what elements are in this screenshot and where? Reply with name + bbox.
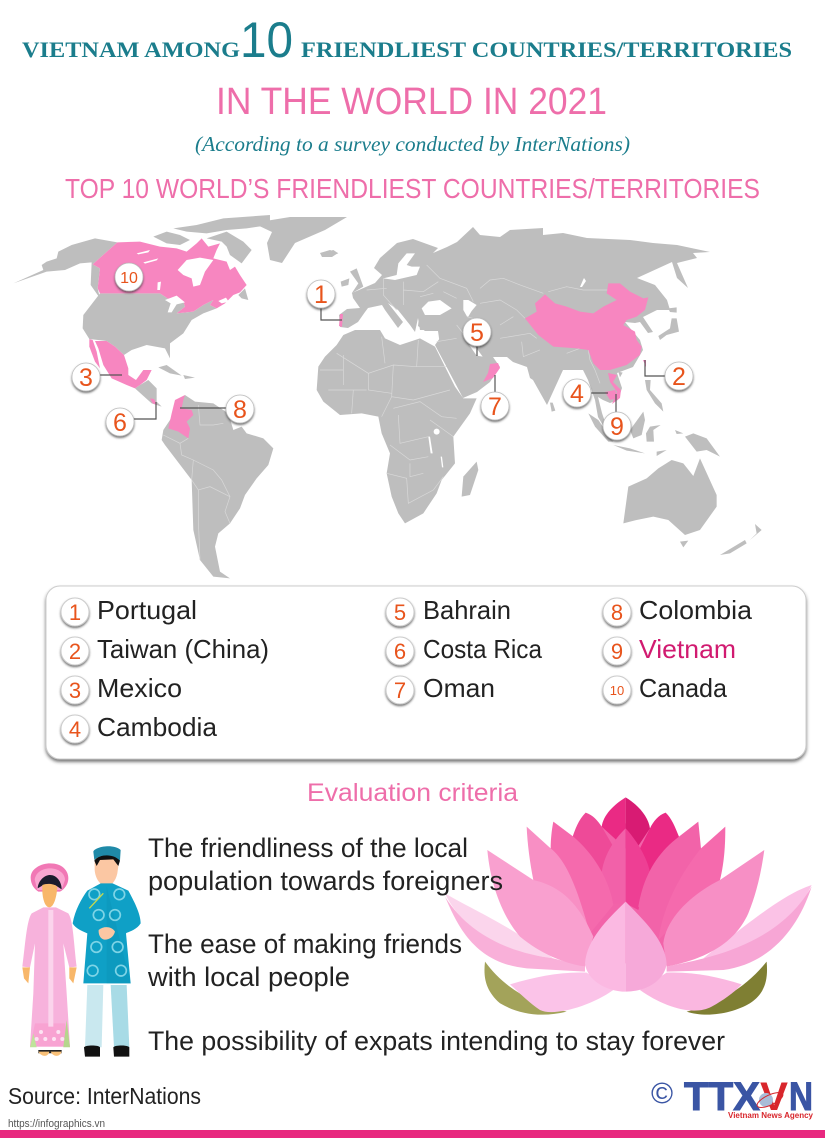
criteria heading: Evaluation criteria xyxy=(307,779,518,807)
Rank 5 Bahrain: Bahrain xyxy=(423,595,511,625)
world map xyxy=(13,215,762,578)
South America xyxy=(162,395,273,578)
Rank 2 Taiwan: 2 xyxy=(69,639,81,664)
criterion 2: The ease of making friends xyxy=(148,929,462,959)
Turkey and Middle East land xyxy=(418,312,478,345)
Vietnam xyxy=(608,373,621,404)
Rank 9 Vietnam: 9 xyxy=(611,639,623,664)
callout lines xyxy=(100,308,665,419)
callout 3 xyxy=(72,363,100,392)
title line 1: 10 xyxy=(240,12,293,68)
Rank 3 Mexico: 3 xyxy=(69,678,81,703)
callout 5: 5 xyxy=(470,319,484,347)
Rank 6 Costa Rica: Costa Rica xyxy=(423,634,543,664)
Rank 1 Portugal: 1 xyxy=(69,600,81,625)
logo: TTXVN: Vietnam News Agency xyxy=(728,1111,814,1120)
Taiwan xyxy=(643,360,646,367)
Rank 4 Cambodia: Cambodia xyxy=(97,712,218,742)
Rank 3 Mexico xyxy=(61,673,182,704)
highlighted Asia and Portugal xyxy=(339,283,648,404)
Rank 10 Canada xyxy=(603,673,728,704)
woman xyxy=(22,863,77,1056)
Portugal xyxy=(339,314,343,327)
callout 5 xyxy=(463,318,491,347)
Greenland and Iceland xyxy=(253,217,347,263)
title line 1: FRIENDLIEST COUNTRIES/TERRITORIES xyxy=(301,37,792,62)
callout 1: 1 xyxy=(314,281,328,309)
Rank 7 Oman: Oman xyxy=(423,673,495,703)
criteria text xyxy=(147,833,725,1056)
callout 7: 7 xyxy=(488,393,502,421)
criterion 3: The possibility of expats intending to stay forever xyxy=(148,1026,725,1056)
criterion 1 xyxy=(148,833,503,896)
seas xyxy=(383,253,483,357)
callout 1 xyxy=(307,280,335,309)
Rank 6 Costa Rica: 6 xyxy=(394,639,406,664)
Rank 7 Oman: 7 xyxy=(394,678,406,703)
Rank 1 Portugal xyxy=(61,595,197,626)
Rank 9 Vietnam xyxy=(603,634,736,665)
callout 6 xyxy=(106,408,134,437)
callout 2: 2 xyxy=(672,363,686,391)
Rank 4 Cambodia: 4 xyxy=(69,717,81,742)
callout 2 xyxy=(665,362,693,391)
North America xyxy=(13,215,270,407)
subtitle: (According to a survey conducted by InterNations) xyxy=(195,132,630,156)
Rank 2 Taiwan: Taiwan (China) xyxy=(97,634,269,664)
UK, Ireland, Japan, islands xyxy=(320,250,762,555)
logo: TTXVN: V xyxy=(760,1075,788,1119)
criterion 2 xyxy=(147,929,462,992)
Rank 10 Canada: Canada xyxy=(639,673,728,703)
Canada xyxy=(93,238,247,313)
Rank 10 Canada: 10 xyxy=(610,683,624,698)
Rank 1 Portugal: Portugal xyxy=(97,595,197,625)
title line 1: VIETNAM AMONG xyxy=(22,37,240,62)
callout 8 xyxy=(226,395,254,424)
panel: country ranking xyxy=(46,586,806,759)
Colombia xyxy=(168,395,193,438)
source: Source: InterNations xyxy=(8,1083,201,1109)
callout 9: 9 xyxy=(610,413,624,441)
icon: couple in ao dai xyxy=(22,846,141,1057)
title line 2: IN THE WORLD IN 2021 xyxy=(216,81,607,123)
logo: TTXVN xyxy=(651,1075,814,1120)
Africa xyxy=(317,330,478,523)
footer bar xyxy=(0,1130,825,1138)
callout 7 xyxy=(481,392,509,421)
icon: lotus xyxy=(445,797,812,1015)
criterion 1: population towards foreigners xyxy=(148,866,503,896)
logo: TTXVN: © xyxy=(651,1078,673,1110)
callout 10 xyxy=(115,263,143,291)
Cambodia xyxy=(605,390,618,400)
logo: TTXVN: TTX xyxy=(684,1075,760,1119)
url: https://infographics.vn xyxy=(8,1118,105,1130)
criterion 1: The friendliness of the local xyxy=(148,833,468,863)
callout 3: 3 xyxy=(79,364,93,392)
callout 9 xyxy=(603,412,631,441)
Rank 7 Oman xyxy=(386,673,495,704)
title line 1 xyxy=(22,12,792,68)
Rank 8 Colombia: Colombia xyxy=(639,595,753,625)
Mexico xyxy=(89,339,157,405)
callout 4: 4 xyxy=(570,380,584,408)
China xyxy=(525,283,648,370)
callout 10: 10 xyxy=(120,270,138,287)
callout 4 xyxy=(563,379,591,408)
Rank 3 Mexico: Mexico xyxy=(97,673,182,703)
Rank 9 Vietnam: Vietnam xyxy=(639,634,736,664)
Rank 5 Bahrain: 5 xyxy=(394,600,406,625)
callout 8: 8 xyxy=(233,396,247,424)
criterion 2: with local people xyxy=(147,962,350,992)
callout 6: 6 xyxy=(113,409,127,437)
logo: TTXVN: N xyxy=(789,1075,813,1119)
Oman xyxy=(483,363,500,382)
man xyxy=(73,846,141,1057)
Rank 5 Bahrain xyxy=(386,595,511,626)
Eurasia xyxy=(339,227,710,437)
Rank 8 Colombia: 8 xyxy=(611,600,623,625)
